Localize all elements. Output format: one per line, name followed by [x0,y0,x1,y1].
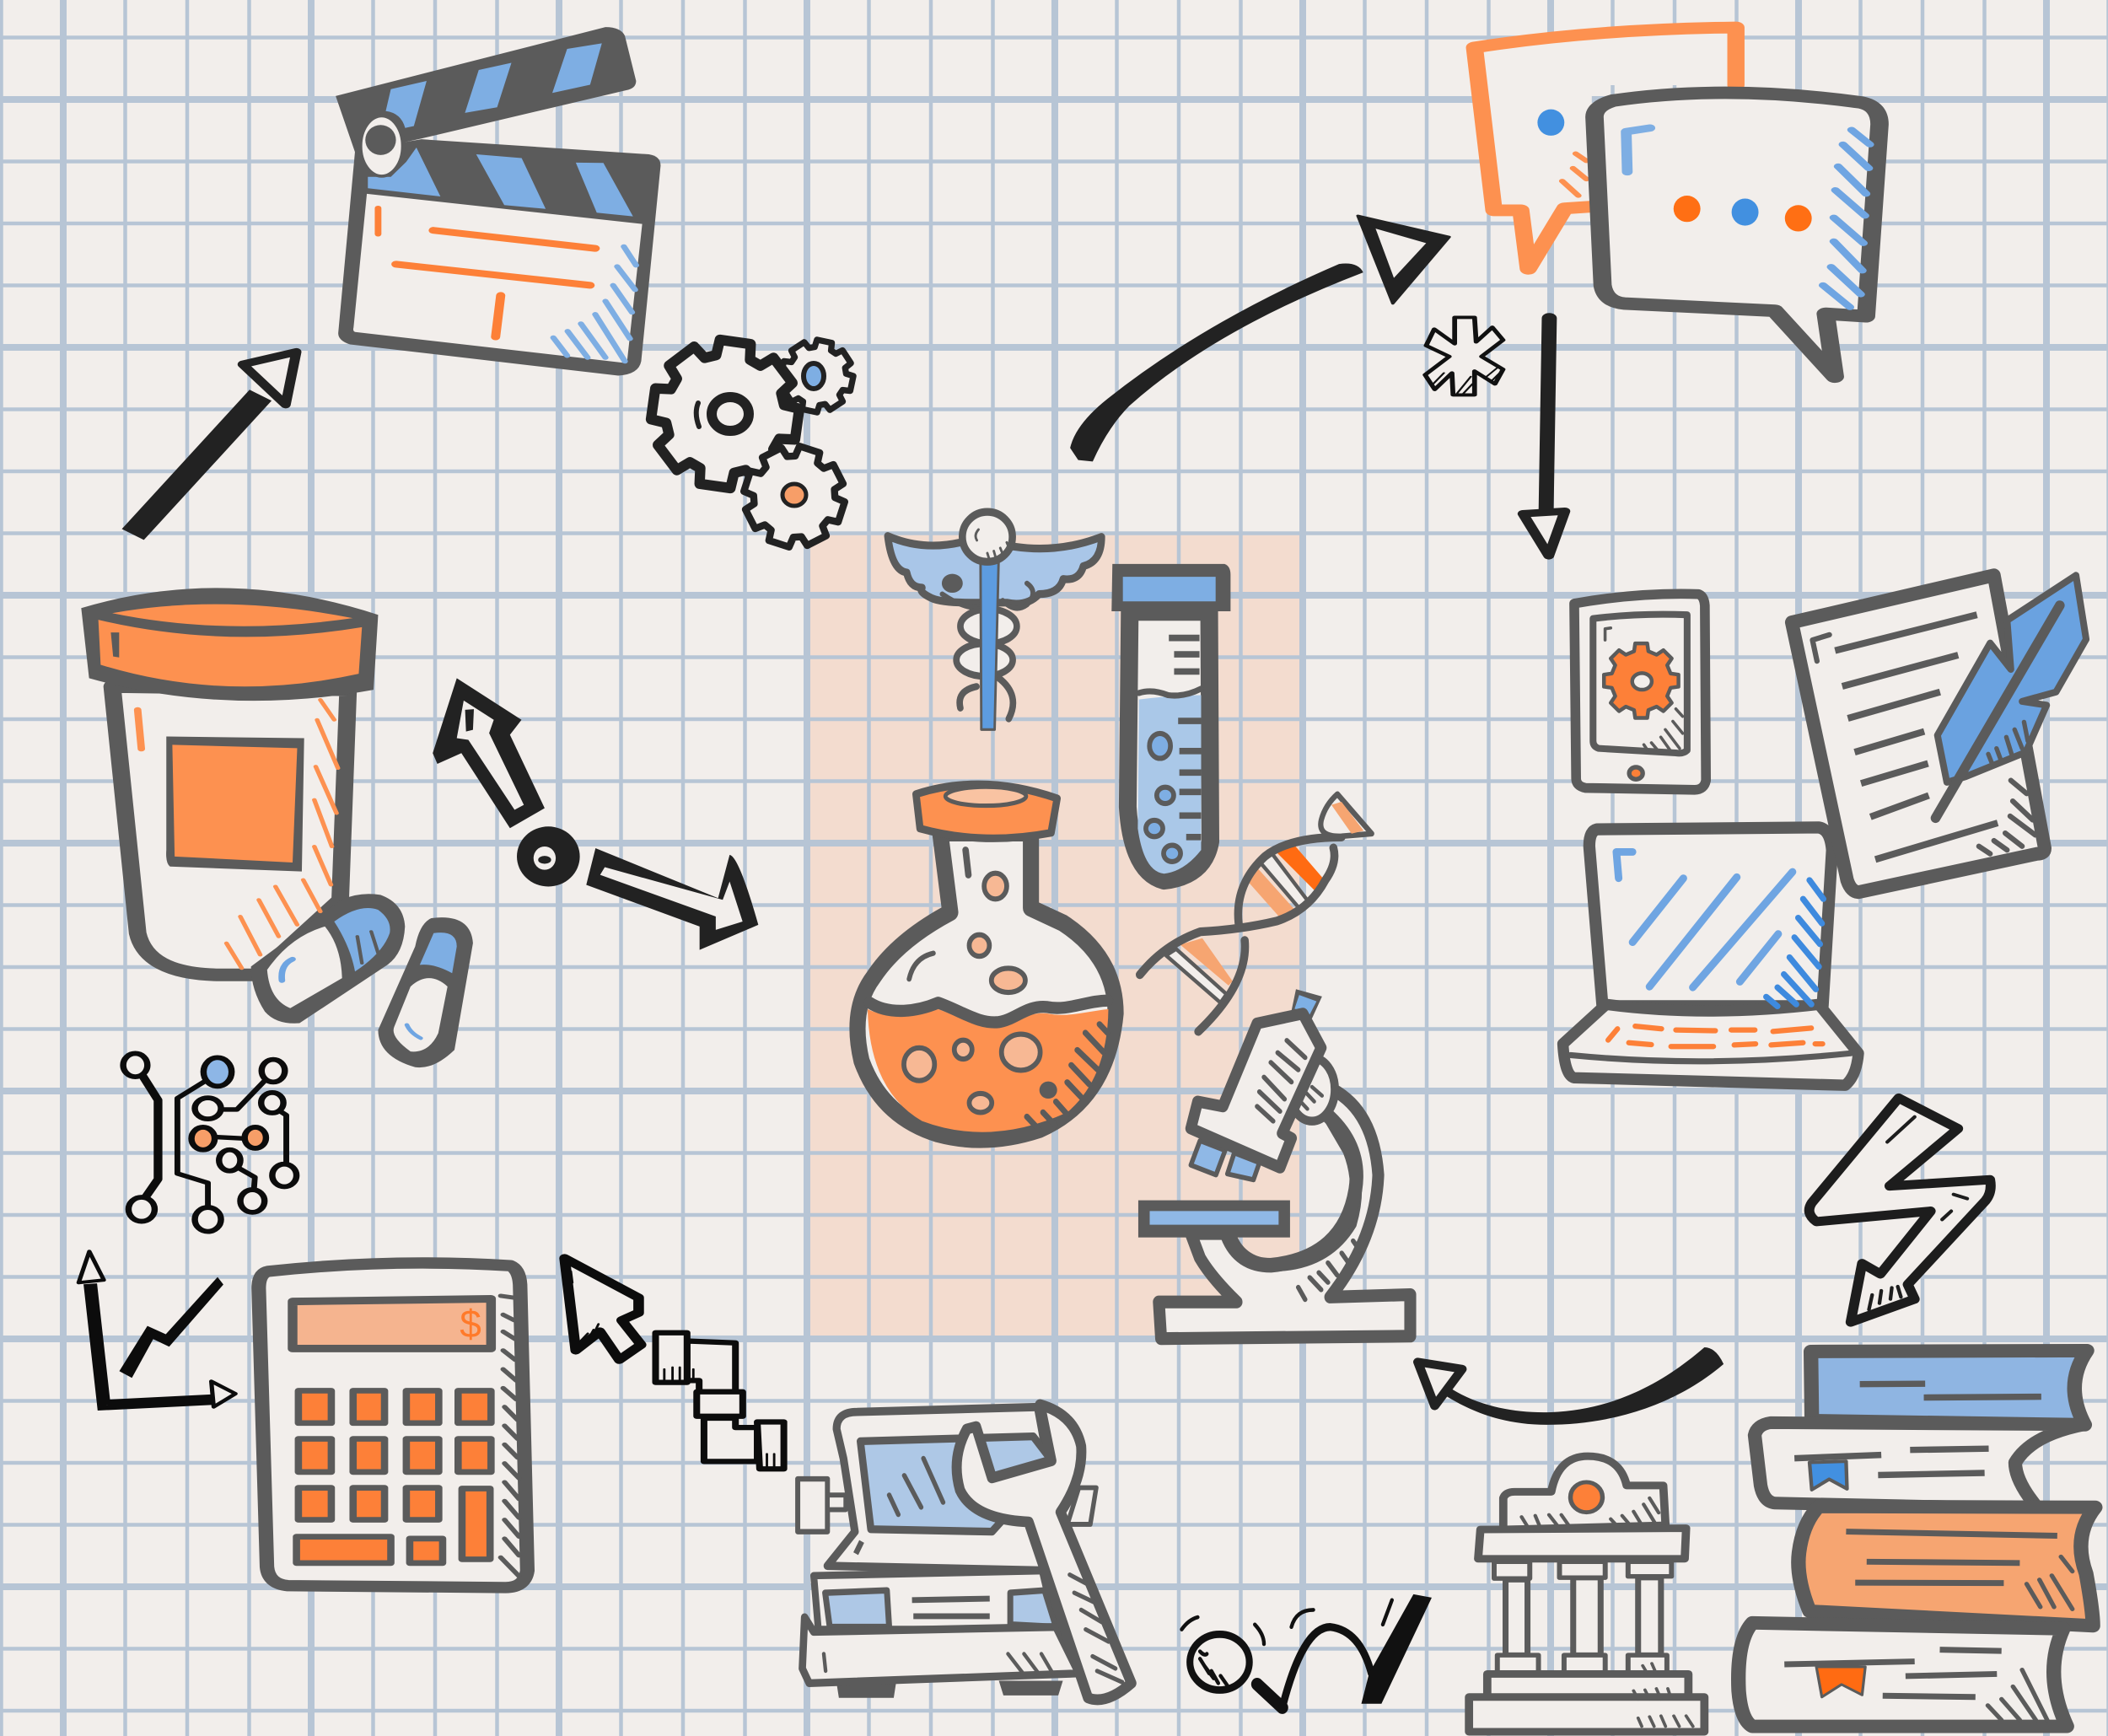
book: white with blue bookmark [1755,1422,2084,1508]
icon: medicine bottle [81,588,378,975]
icon: gears [643,332,859,559]
icon: mouse cursor [565,1258,641,1360]
icon: truck with wrench [798,1405,1132,1700]
arrow: curved left to microscope [1417,1347,1724,1425]
icon: test tube [1111,564,1230,880]
icon: chain links [656,1333,784,1469]
icon: calculator [259,1263,527,1588]
icon: stack of books [1739,1351,2095,1727]
book: white with orange bookmark [1739,1623,2067,1727]
icon: speech bubbles [1475,28,1879,377]
icon: ball and checkmark [1181,1594,1432,1707]
icon: circuit [123,1053,297,1232]
icon: tablet with gear [1574,594,1706,790]
icon: asterisk [1425,317,1503,395]
icon: clapperboard [336,27,660,376]
icon: paper and feather quill [1792,575,2086,892]
icon: classical building [1469,1456,1704,1732]
icon: laptop [1563,827,1858,1085]
icon: lightning bolt [1810,1098,1991,1322]
arrow: up right to clapperboard [133,352,296,535]
central highlighted panel [809,535,1302,1337]
calculator display symbol: $ [460,1302,481,1346]
book: blue [1811,1351,2087,1425]
icon: growth chart arrows [78,1251,235,1407]
icon: caduceus [888,512,1101,729]
icon: large capsule [251,894,405,1024]
arrow: down from speech bubbles [1523,318,1565,556]
arrow: double headed from circle [433,678,758,950]
icon: small capsule [378,917,473,1067]
icon: microscope [1138,989,1410,1339]
icon: DNA helix [1140,794,1372,1031]
book: orange [1799,1507,2095,1626]
icon: laboratory flask [858,784,1116,1139]
arrow: curved up to speech bubbles [1070,216,1449,461]
